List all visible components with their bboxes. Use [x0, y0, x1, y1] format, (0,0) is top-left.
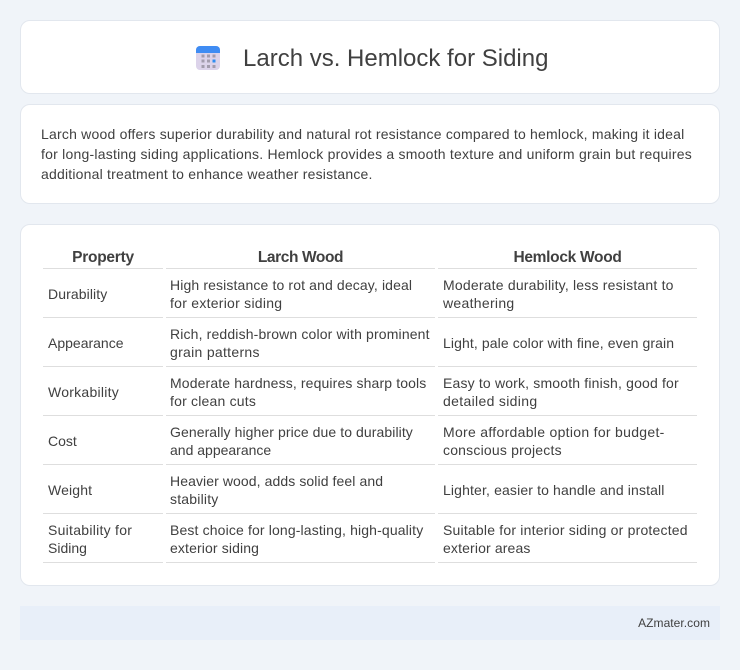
comparison table panel: Lighter, easier to handle and install — [443, 482, 665, 498]
comparison table panel: grain patterns — [170, 344, 260, 360]
comparison table panel: weathering — [443, 295, 514, 311]
comparison table panel: Suitable for interior siding or protected — [443, 522, 688, 538]
comparison table panel: and appearance — [170, 442, 271, 458]
comparison table panel: Light, pale color with fine, even grain — [443, 335, 674, 351]
comparison table panel: Moderate durability, less resistant to — [443, 277, 674, 293]
row: durability: Durability — [48, 286, 107, 302]
row: workability: Workability — [48, 384, 119, 400]
comparison table panel: High resistance to rot and decay, ideal — [170, 277, 412, 293]
comparison table panel: conscious projects — [443, 442, 562, 458]
comparison table panel: Generally higher price due to durability — [170, 424, 413, 440]
comparison table panel: detailed siding — [443, 393, 537, 409]
row: suitability: Siding — [48, 540, 87, 556]
row: cost: Cost — [48, 433, 77, 449]
table header: larch: Larch Wood — [258, 249, 343, 266]
comparison table panel: Rich, reddish-brown color with prominent — [170, 326, 430, 342]
intro text: for long-lasting siding applications. Hemlock provides a smooth texture and uniform grain but requires — [41, 146, 692, 162]
comparison table panel: Best choice for long-lasting, high-quality — [170, 522, 423, 538]
comparison table panel: for exterior siding — [170, 295, 282, 311]
footer bar — [20, 606, 720, 640]
comparison table panel: stability — [170, 491, 218, 507]
row: suitability — [48, 522, 132, 556]
intro text — [41, 126, 692, 182]
comparison table panel — [20, 224, 720, 586]
intro text: Larch wood offers superior durability and natural rot resistance compared to hemlock, making it ideal — [41, 126, 684, 142]
row: appearance: Appearance — [48, 335, 124, 351]
comparison table panel: Moderate hardness, requires sharp tools — [170, 375, 426, 391]
header panel — [20, 20, 720, 94]
row: suitability: Suitability for — [48, 522, 132, 538]
comparison table panel: for clean cuts — [170, 393, 256, 409]
table header: property: Property — [72, 249, 134, 266]
title: Larch vs. Hemlock for Siding — [243, 45, 548, 72]
row: weight: Weight — [48, 482, 92, 498]
comparison table panel: Heavier wood, adds solid feel and — [170, 473, 383, 489]
footer source: AZmater.com — [638, 616, 710, 630]
comparison table panel: exterior siding — [170, 540, 259, 556]
comparison table panel: More affordable option for budget- — [443, 424, 665, 440]
table header: hemlock: Hemlock Wood — [513, 249, 622, 266]
comparison table panel: Easy to work, smooth finish, good for — [443, 375, 679, 391]
comparison table panel: exterior areas — [443, 540, 531, 556]
intro text panel — [20, 104, 720, 204]
icon: calendar — [196, 46, 220, 70]
intro text: additional treatment to enhance weather resistance. — [41, 166, 373, 182]
